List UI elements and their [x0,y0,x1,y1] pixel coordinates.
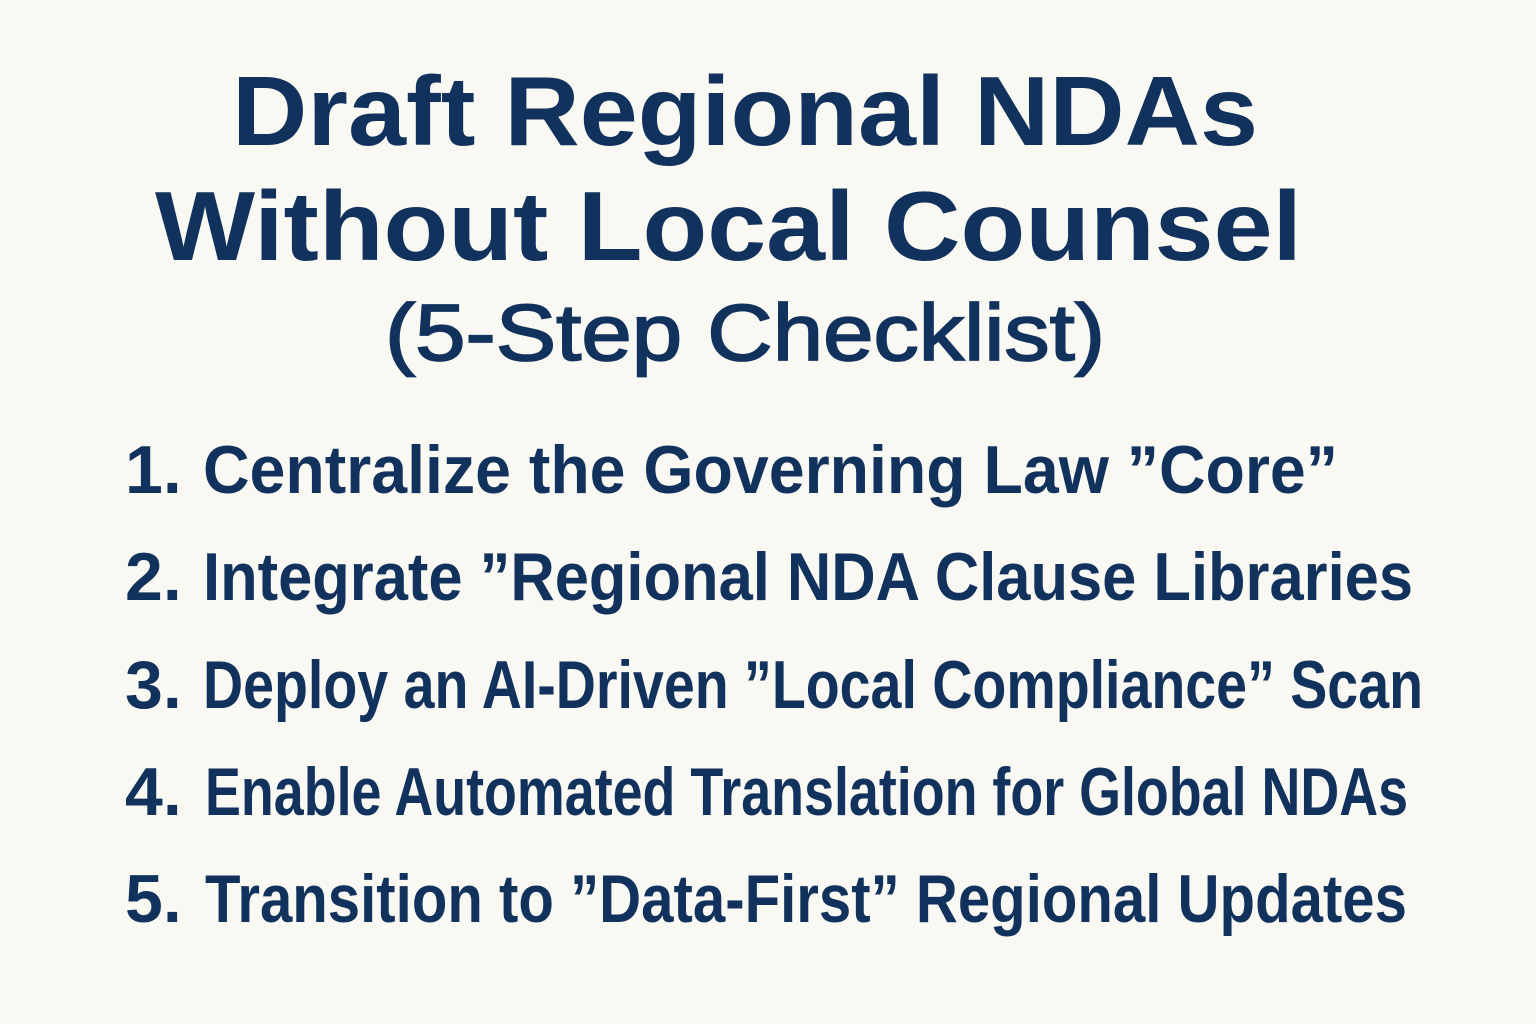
title: Without Local Counsel [155,171,1302,281]
title: (5-Step Checklist) [385,288,1105,377]
title: Draft Regional NDAs [232,56,1258,166]
step 4: 4. [125,754,182,830]
step 2: Integrate ”Regional NDA Clause Libraries [203,539,1413,615]
step 1: 1. [125,432,182,508]
step 1: Centralize the Governing Law ”Core” [203,432,1338,508]
step 2: 2. [125,539,182,615]
step 5: 5. [125,861,182,937]
checklist [125,432,1423,937]
title [155,56,1302,377]
step 3: 3. [125,647,182,723]
